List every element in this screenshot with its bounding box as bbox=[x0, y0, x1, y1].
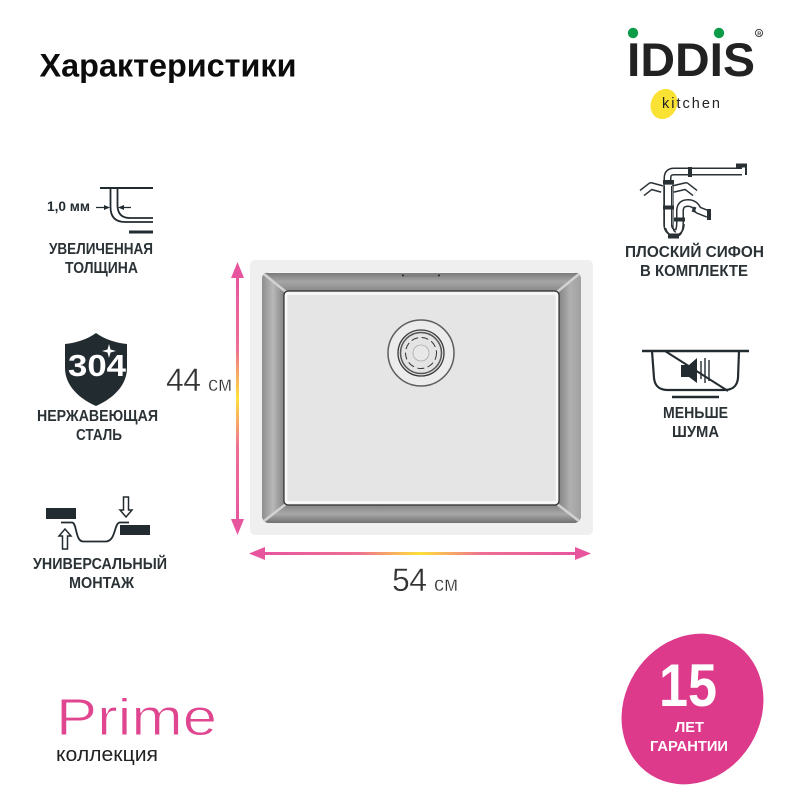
icon: less noise bbox=[642, 351, 749, 397]
arrow: height dimension bbox=[231, 262, 244, 535]
badge: 15 years warranty: ГАРАНТИИ bbox=[650, 738, 728, 755]
label: flat siphon: ПЛОСКИЙ СИФОН bbox=[625, 243, 764, 261]
label: thickness: УВЕЛИЧЕННАЯ bbox=[49, 241, 153, 258]
label: universal mounting: УНИВЕРСАЛЬНЫЙ bbox=[33, 555, 167, 573]
title: Характеристики bbox=[40, 48, 296, 84]
badge: 15 years warranty: 15 bbox=[659, 652, 717, 719]
label: flat siphon: В КОМПЛЕКТЕ bbox=[640, 263, 748, 280]
logo: IDDIS kitchen: kitchen bbox=[662, 96, 720, 112]
icon: thickness 1.0 mm: 1,0 мм bbox=[47, 198, 90, 214]
label: height 44 cm: см bbox=[208, 373, 232, 396]
label: less noise: ШУМА bbox=[672, 424, 719, 441]
logo: IDDIS kitchen: IDDIS bbox=[627, 33, 755, 86]
icon: siphon bbox=[642, 165, 747, 236]
collection: Prime: коллекция bbox=[56, 744, 158, 766]
label: width 54 cm: 54 bbox=[392, 562, 427, 598]
arrow: width dimension bbox=[249, 547, 591, 560]
icon: 304 steel shield bbox=[65, 333, 127, 406]
logo: IDDIS kitchen bbox=[627, 28, 763, 124]
icon: 304 steel shield: 304 bbox=[68, 348, 127, 383]
collection: Prime bbox=[56, 689, 217, 766]
label: less noise: МЕНЬШЕ bbox=[663, 405, 728, 422]
badge: 15 years warranty bbox=[593, 607, 792, 800]
drain bbox=[388, 320, 454, 386]
collection: Prime: Prime bbox=[56, 689, 217, 747]
logo: IDDIS kitchen: R bbox=[757, 31, 761, 37]
label: width 54 cm: см bbox=[434, 573, 458, 596]
icon: thickness 1.0 mm bbox=[47, 188, 153, 232]
label: thickness: ТОЛЩИНА bbox=[65, 260, 138, 277]
sink illustration bbox=[250, 260, 593, 535]
label: stainless steel: НЕРЖАВЕЮЩАЯ bbox=[37, 408, 158, 425]
icon: universal mounting bbox=[46, 497, 150, 549]
badge: 15 years warranty: ЛЕТ bbox=[675, 719, 704, 736]
label: stainless steel: СТАЛЬ bbox=[76, 427, 122, 444]
label: universal mounting: МОНТАЖ bbox=[69, 575, 135, 592]
label: height 44 cm: 44 bbox=[166, 362, 201, 398]
